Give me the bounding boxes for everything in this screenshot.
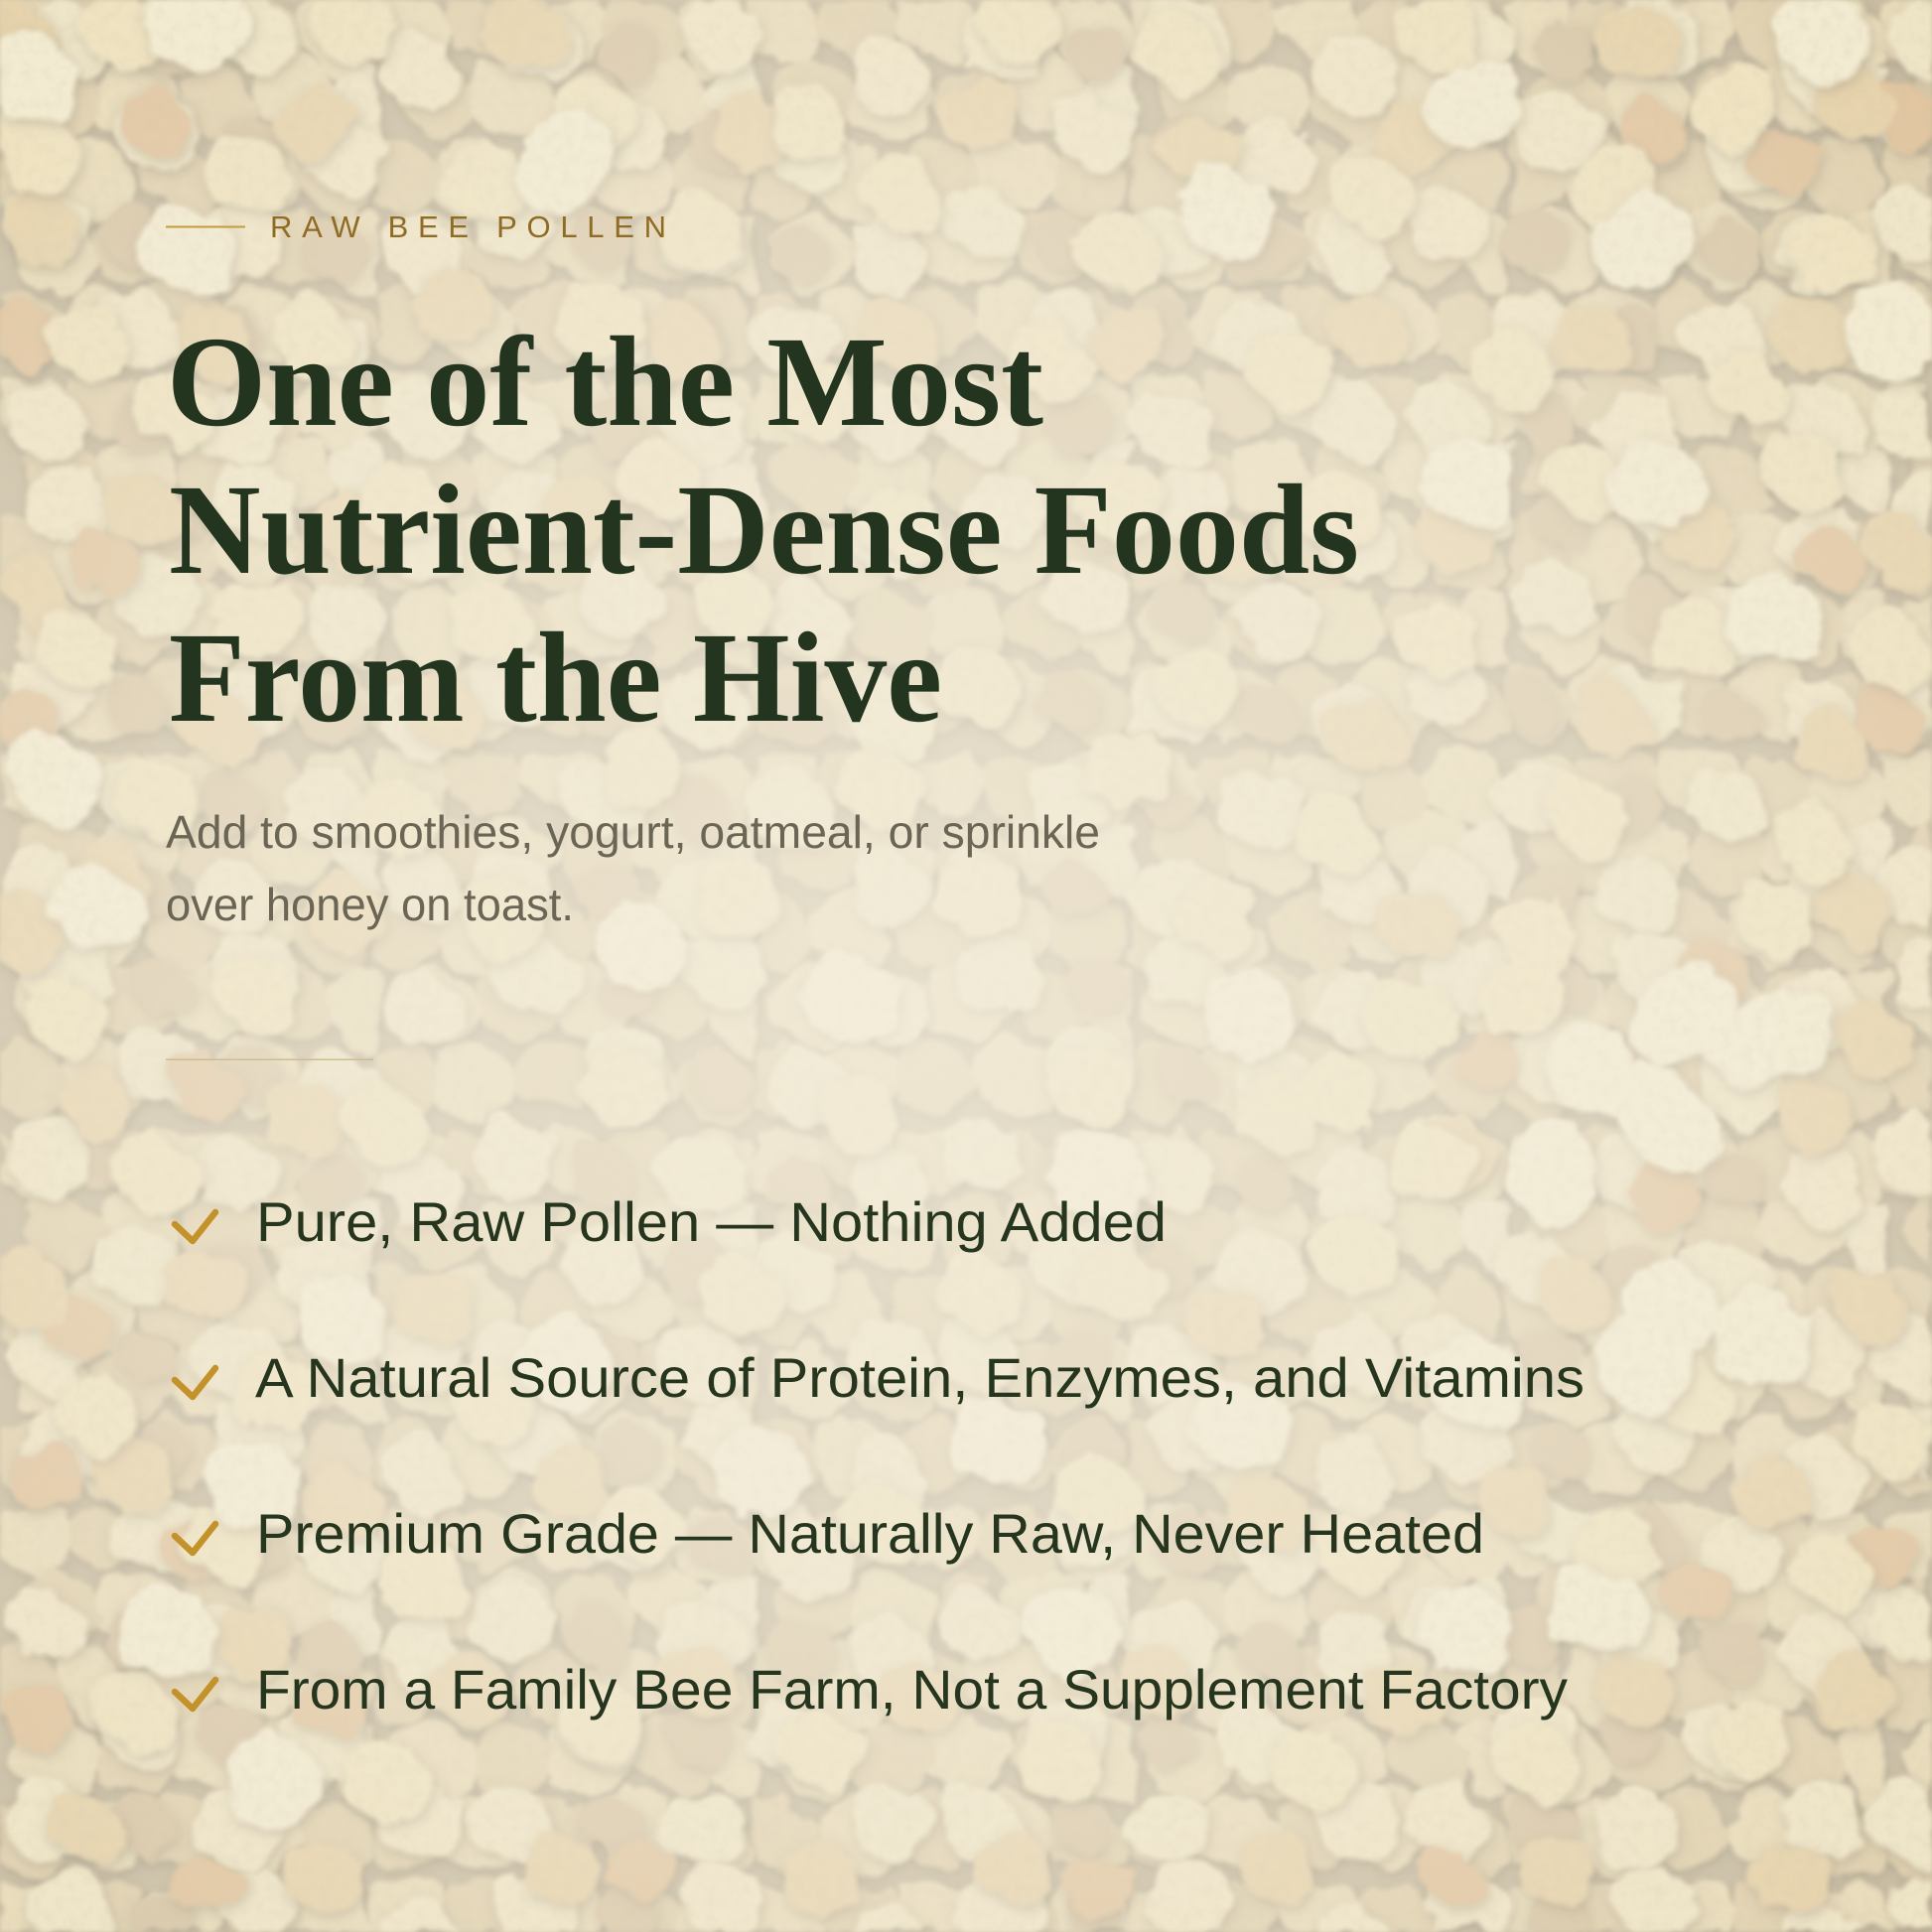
subtitle text: over honey on toast.: [166, 879, 574, 930]
list item 4: From a Family Bee Farm, Not a Supplement Factory: [256, 1658, 1568, 1721]
list item 3: Premium Grade — Naturally Raw, Never Heated: [256, 1502, 1484, 1565]
benefit list: [175, 1190, 1585, 1721]
list item 1: Pure, Raw Pollen — Nothing Added: [256, 1190, 1167, 1253]
title: One of the Most: [167, 311, 1043, 454]
title: Nutrient-Dense Foods: [169, 459, 1359, 602]
eyebrow label with rule: RAW BEE POLLEN: [270, 209, 666, 244]
subtitle text: [166, 806, 1100, 930]
title: From the Hive: [169, 607, 942, 750]
list item 2: A Natural Source of Protein, Enzymes, and Vitamins: [255, 1346, 1585, 1409]
title: [167, 311, 1359, 750]
subtitle text: Add to smoothies, yogurt, oatmeal, or sprinkle: [166, 806, 1100, 858]
